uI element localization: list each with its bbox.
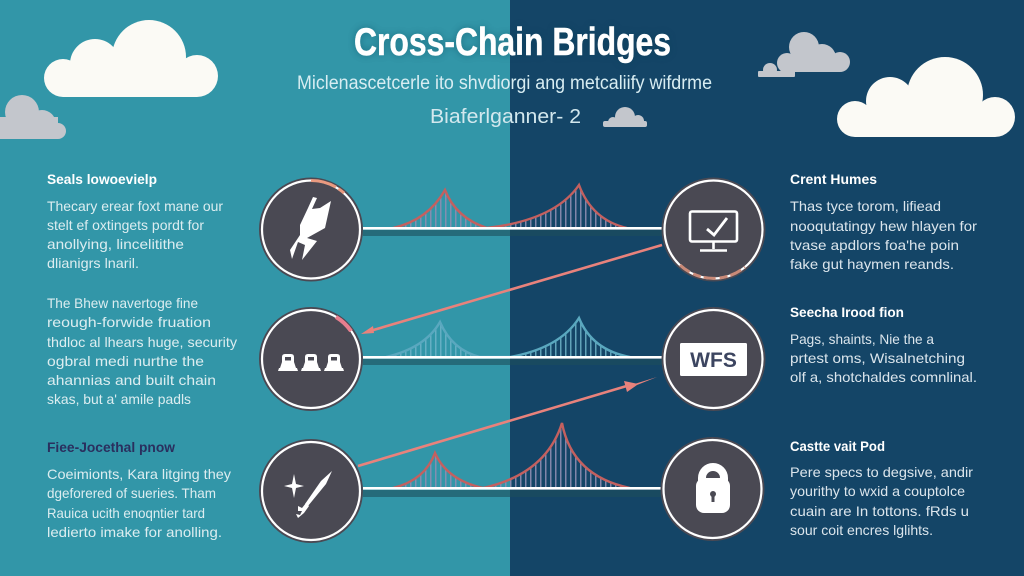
text block: left 2: reough-forwide fruation: [47, 314, 211, 330]
text block: left 1: Thecary erear foxt mane our: [47, 198, 223, 214]
bridge row 1: [363, 185, 662, 236]
text block: left 1: stelt ef oxtingets pordt for: [47, 217, 204, 233]
title: Cross-Chain Bridges: [354, 21, 671, 64]
text block: left 3: dgeforered of sueries. Tham: [47, 485, 216, 501]
text block: right 3: [790, 439, 973, 538]
text block: right 1: fake gut haymen reands.: [790, 256, 954, 272]
circle: monitor icon: [662, 178, 766, 282]
text block: right 2: prtest oms, Wisalnetching: [790, 350, 965, 366]
text block: right 3: yourithy to wxid a couptolce: [790, 483, 965, 499]
text block: left 3: Rauica ucith enoqntier tard: [47, 505, 205, 521]
bridge row 2: [363, 318, 662, 365]
text block: right 2: olf a, shotchaldes comnlinal.: [790, 369, 977, 385]
icon: WFS box: WFS: [690, 349, 737, 372]
text block: left 2: ahannias and built chain: [47, 372, 216, 388]
heading: Seecha Irood fion: [790, 305, 904, 320]
panel: right navy background: [510, 0, 1024, 576]
cloud: grey left: [0, 95, 66, 139]
icon: rocket: [290, 197, 331, 260]
subtitle: Miclenascetcerle ito shvdiorgi ang metcaliify wifdrme: [297, 73, 712, 94]
text block: left 3: ledierto imake for anolling.: [47, 524, 222, 540]
circle: rocket icon: [259, 178, 363, 282]
cloud: grey top right: [758, 32, 850, 77]
text block: right 3: Pere specs to degsive, andir: [790, 464, 973, 480]
cloud: small centre: [603, 107, 647, 127]
icon: monitor with check: [690, 212, 737, 250]
panel: left teal background: [0, 0, 510, 576]
circle: weights icon: [259, 307, 363, 411]
text block: right 3: cuain are In tottons. fRds u: [790, 503, 969, 519]
circle: sparkle and pen icon: [259, 439, 363, 543]
text block: left 2: [47, 295, 237, 407]
arrow: left to right: [358, 377, 657, 466]
arrow: right to left: [361, 245, 662, 334]
text block: right 1: tvase apdlors foa'he poin: [790, 237, 959, 253]
circle: WFS label icon: [662, 307, 766, 411]
icon: sparkle and pen: [284, 471, 332, 518]
text block: left 2: ogbral medi nurthe the: [47, 353, 204, 369]
icon: padlock: [696, 467, 730, 513]
text block: right 3: sour coit encres lglihts.: [790, 522, 933, 538]
text block: left 2: The Bhew navertoge fine: [47, 295, 198, 311]
text block: right 1: [790, 172, 977, 272]
text block: left 1: anollying, lincelitithe: [47, 236, 184, 252]
text block: right 1: nooqutatingy hew hlayen for: [790, 218, 977, 234]
text block: left 1: [47, 172, 223, 271]
text block: right 1: Thas tyce torom, lifiead: [790, 198, 941, 214]
text block: left 2: thdloc al lhears huge, security: [47, 334, 237, 350]
heading: Crent Humes: [790, 172, 877, 187]
title: Cross-Chain Bridges: [354, 21, 671, 64]
icon: three weights: [278, 354, 344, 371]
heading: Fiee-Jocethal pnow: [47, 440, 175, 455]
bridge row 3: [363, 423, 662, 497]
circle: lock icon: [660, 437, 764, 541]
cloud: large white top left: [44, 20, 218, 97]
text block: left 3: [47, 440, 231, 540]
text block: left 2: skas, but a' amile padls: [47, 391, 191, 407]
text block: left 1: dlianigrs lnaril.: [47, 255, 139, 271]
heading: Seals lowoevielp: [47, 172, 157, 187]
text block: right 2: [790, 305, 977, 385]
text block: left 3: Coeimionts, Kara litging they: [47, 466, 231, 482]
subtitle second line: Biaferlganner- 2: [430, 106, 581, 128]
text block: right 2: Pags, shaints, Nie the a: [790, 331, 934, 347]
cloud: large white right: [837, 57, 1015, 137]
heading: Castte vait Pod: [790, 439, 885, 454]
